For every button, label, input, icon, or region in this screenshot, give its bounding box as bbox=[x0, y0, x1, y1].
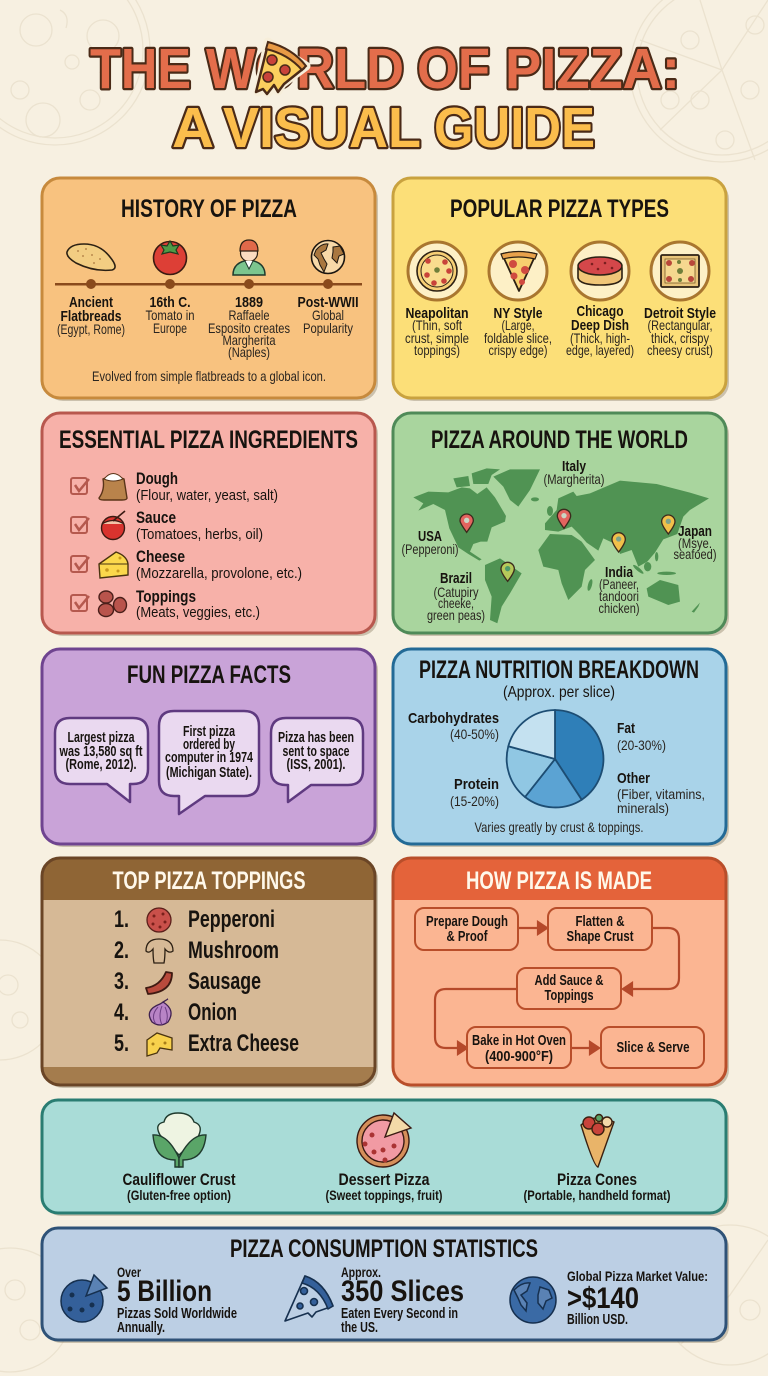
text: 5 billion: Pizzas Sold Worldwide bbox=[117, 1305, 237, 1322]
label: other: minerals) bbox=[617, 800, 669, 816]
step: prepare dough: Prepare Dough bbox=[426, 913, 508, 930]
label: carbohydrates bbox=[408, 710, 499, 742]
item: sausage: Sausage bbox=[188, 968, 261, 995]
icon: ny slice bbox=[489, 242, 547, 300]
icon: pizza slice in title bbox=[256, 42, 306, 94]
step: prepare dough bbox=[415, 908, 518, 950]
subheading: per slice: (Approx. per slice) bbox=[503, 684, 615, 701]
speech bubble: largest pizza bbox=[55, 718, 148, 802]
text: dessert pizza: (Sweet toppings, fruit) bbox=[326, 1187, 442, 1203]
panel: top pizza toppings bbox=[42, 858, 378, 1088]
text: ancient flatbreads: Flatbreads bbox=[60, 308, 122, 325]
label: fat: (20-30%) bbox=[617, 737, 666, 753]
icon: pizza slice bbox=[285, 1276, 333, 1321]
text: sauce bbox=[136, 508, 263, 543]
step: add sauce: Toppings bbox=[544, 987, 594, 1004]
heading: world: PIZZA AROUND THE WORLD bbox=[431, 426, 688, 454]
text: 350 slices: the US. bbox=[341, 1319, 378, 1336]
icon: flour sack bbox=[99, 474, 127, 500]
text: pizza cones: Pizza Cones bbox=[557, 1170, 637, 1189]
label: brazil: green peas) bbox=[427, 607, 485, 623]
text: dessert pizza bbox=[326, 1170, 442, 1203]
icon: flatbread bbox=[67, 244, 115, 270]
text: sauce: Sauce bbox=[136, 508, 176, 527]
label: india: tandoori bbox=[599, 588, 639, 604]
icon: sauce bowl bbox=[102, 511, 125, 540]
text: cheese: (Mozzarella, provolone, etc.) bbox=[136, 565, 302, 582]
icon: globe bbox=[312, 240, 344, 274]
icon: whole pizza bbox=[61, 1275, 107, 1322]
text: chicago deep dish: Deep Dish bbox=[571, 317, 629, 334]
text: 1889: Margherita bbox=[222, 332, 276, 348]
panel: consumption statistics bbox=[42, 1228, 729, 1343]
step: bake: (400-900°F) bbox=[485, 1048, 553, 1065]
arrows bbox=[435, 922, 679, 1054]
text: neapolitan: Neapolitan bbox=[406, 305, 468, 322]
text: chicago deep dish: (Thick, high- bbox=[570, 330, 630, 346]
speech bubble: pizza in space bbox=[271, 718, 363, 802]
item: extra cheese: 5. bbox=[114, 1030, 129, 1057]
text: pizza cones bbox=[524, 1170, 670, 1203]
item: extra cheese bbox=[114, 1030, 299, 1057]
text: 5 billion: Annually. bbox=[117, 1319, 165, 1336]
map pins bbox=[460, 509, 675, 581]
label: other: (Fiber, vitamins, bbox=[617, 786, 705, 802]
text: 16th century: 16th C. bbox=[150, 294, 190, 311]
text: ny style: crispy edge) bbox=[488, 342, 548, 358]
title: A bbox=[172, 96, 214, 160]
text: 1889: 1889 bbox=[235, 294, 263, 311]
heading: facts: FUN PIZZA FACTS bbox=[127, 661, 291, 689]
text: ancient flatbreads bbox=[57, 294, 125, 337]
step: slice and serve bbox=[601, 1027, 704, 1068]
text: toppings bbox=[136, 587, 260, 621]
text: market value: Billion USD. bbox=[567, 1311, 628, 1328]
text: 1889: Esposito creates bbox=[208, 320, 290, 336]
text: 350 slices: Approx. bbox=[341, 1264, 381, 1280]
panel: history of pizza bbox=[42, 178, 378, 401]
step: slice and serve: Slice & Serve bbox=[616, 1039, 690, 1056]
label: brazil: cheeke, bbox=[438, 595, 474, 611]
checkboxes bbox=[71, 478, 89, 611]
icon: pizza cone bbox=[581, 1114, 614, 1167]
label: brazil: Brazil bbox=[440, 570, 472, 587]
title: WORLD bbox=[206, 37, 404, 101]
world map bbox=[413, 468, 709, 623]
item: pepperoni bbox=[114, 906, 275, 933]
text: 16th century: Tomato in bbox=[146, 307, 194, 323]
label: japan: Japan bbox=[678, 523, 712, 540]
speech bubble: largest pizza: was 13,580 sq ft bbox=[59, 743, 142, 760]
speech bubble: first computer order: First pizza bbox=[183, 723, 235, 740]
text: toppings: (Meats, veggies, etc.) bbox=[136, 604, 260, 621]
text: cauliflower crust bbox=[122, 1170, 236, 1203]
icon: tomato bbox=[154, 241, 186, 274]
text: chicago deep dish bbox=[566, 303, 634, 358]
step: add sauce bbox=[517, 968, 621, 1009]
text: toppings: Toppings bbox=[136, 587, 196, 606]
label: fat: Fat bbox=[617, 720, 635, 737]
text: dessert pizza: Dessert Pizza bbox=[338, 1170, 430, 1189]
item: pepperoni: Pepperoni bbox=[188, 906, 275, 933]
heading: types: POPULAR PIZZA TYPES bbox=[450, 195, 669, 223]
icon: dessert pizza bbox=[357, 1113, 411, 1167]
text: cheese bbox=[136, 547, 302, 582]
step: bake bbox=[467, 1027, 571, 1068]
text: post-wwii: Global bbox=[312, 307, 344, 323]
text: ny style: (Large, bbox=[502, 317, 534, 333]
heading: toppings: TOP PIZZA TOPPINGS bbox=[112, 867, 306, 895]
title: VISUAL bbox=[223, 96, 421, 160]
title: GUIDE bbox=[434, 96, 595, 160]
icon: chicago deep dish bbox=[571, 242, 629, 300]
text: neapolitan: crust, simple bbox=[405, 330, 469, 346]
text: detroit style: cheesy crust) bbox=[647, 342, 713, 358]
text: detroit style: thick, crispy bbox=[651, 330, 709, 346]
step: flatten: Flatten & bbox=[576, 913, 625, 930]
pin: india bbox=[612, 533, 625, 552]
icon: detroit style bbox=[651, 242, 709, 300]
heading: history: HISTORY OF PIZZA bbox=[121, 195, 297, 223]
heading: ingredients: ESSENTIAL PIZZA INGREDIENTS bbox=[59, 426, 358, 454]
item: pepperoni: 1. bbox=[114, 906, 129, 933]
speech bubble: pizza in space: Pizza has been bbox=[278, 729, 354, 746]
text: detroit style: (Rectangular, bbox=[648, 317, 712, 333]
text: 16th century bbox=[146, 294, 194, 336]
text: 1889: Raffaele bbox=[228, 307, 270, 323]
text: sauce: (Tomatoes, herbs, oil) bbox=[136, 526, 263, 543]
label: usa bbox=[402, 528, 458, 557]
item: sausage bbox=[114, 968, 261, 995]
item: extra cheese: Extra Cheese bbox=[188, 1030, 299, 1057]
panel: alternative pizzas bbox=[42, 1100, 729, 1216]
text: ny style: foldable slice, bbox=[484, 330, 552, 346]
step: bake: Bake in Hot Oven bbox=[472, 1032, 566, 1049]
label: fat bbox=[617, 720, 666, 753]
timeline bbox=[55, 279, 362, 289]
speech bubble: pizza in space: (ISS, 2001). bbox=[286, 756, 346, 773]
label: japan: (Msye. bbox=[678, 535, 712, 551]
speech bubble: largest pizza: (Rome, 2012). bbox=[66, 756, 136, 773]
caption: nutrition: Varies greatly by crust & toppings. bbox=[474, 819, 644, 835]
pin: usa bbox=[460, 514, 473, 532]
label: india bbox=[598, 564, 640, 616]
text: ancient flatbreads: (Egypt, Rome) bbox=[57, 321, 125, 337]
step: add sauce: Add Sauce & bbox=[534, 972, 604, 989]
title: OF bbox=[417, 37, 490, 101]
label: protein bbox=[450, 776, 499, 809]
text: detroit style: Detroit Style bbox=[644, 305, 716, 322]
label: carbohydrates: (40-50%) bbox=[450, 726, 499, 742]
label: brazil bbox=[427, 570, 485, 623]
speech bubble: first computer order bbox=[159, 711, 259, 814]
text: 350 slices: 350 Slices bbox=[341, 1275, 464, 1308]
item: mushroom: 2. bbox=[114, 937, 129, 964]
speech bubble: first computer order: (Michigan State). bbox=[166, 764, 252, 781]
text: 350 slices: Eaten Every Second in bbox=[341, 1305, 458, 1322]
panel: nutrition breakdown bbox=[393, 649, 729, 847]
pie chart bbox=[507, 710, 603, 807]
title bbox=[90, 37, 680, 160]
label: brazil: (Catupiry bbox=[434, 584, 478, 600]
caption: history: Evolved from simple flatbreads to a global icon. bbox=[92, 368, 326, 384]
step: prepare dough: & Proof bbox=[446, 928, 488, 945]
icon: toppings bbox=[98, 591, 126, 616]
text: chicago deep dish: Chicago bbox=[576, 303, 624, 320]
label: italy: (Margherita) bbox=[544, 471, 604, 487]
speech bubble: first computer order: ordered by bbox=[183, 736, 235, 753]
text: dough bbox=[136, 469, 278, 504]
item: onion bbox=[114, 999, 237, 1026]
text: ny style: NY Style bbox=[494, 305, 542, 322]
heading: statistics: PIZZA CONSUMPTION STATISTICS bbox=[230, 1235, 538, 1263]
text: 5 billion bbox=[117, 1264, 237, 1336]
panel: how pizza is made bbox=[393, 858, 729, 1088]
panel: essential ingredients bbox=[42, 413, 378, 636]
text: 16th century: Europe bbox=[153, 320, 187, 336]
pin: brazil bbox=[501, 562, 514, 581]
text: 1889 bbox=[208, 294, 290, 360]
text: post-wwii: Post-WWII bbox=[298, 294, 358, 311]
label: japan bbox=[674, 523, 716, 562]
label: india: (Paneer, bbox=[599, 576, 639, 592]
text: 5 billion: 5 Billion bbox=[117, 1275, 212, 1308]
text: ny style bbox=[484, 305, 552, 358]
text: pizza cones: (Portable, handheld format) bbox=[524, 1187, 670, 1203]
text: neapolitan: toppings) bbox=[414, 342, 460, 358]
text: cauliflower crust: Cauliflower Crust bbox=[122, 1170, 236, 1189]
label: usa: USA bbox=[418, 528, 442, 545]
heading: how made: HOW PIZZA IS MADE bbox=[466, 867, 652, 895]
panel: popular pizza types bbox=[393, 178, 729, 401]
icon: cauliflower bbox=[153, 1113, 206, 1167]
label: other: Other bbox=[617, 770, 650, 787]
step: flatten: Shape Crust bbox=[566, 928, 634, 945]
label: usa: (Pepperoni) bbox=[402, 541, 458, 557]
icon: cheese wedge bbox=[99, 552, 128, 578]
text: post-wwii: Popularity bbox=[303, 320, 353, 336]
item: mushroom bbox=[114, 937, 279, 964]
text: chicago deep dish: edge, layered) bbox=[566, 342, 634, 358]
text: post-wwii bbox=[298, 294, 358, 336]
text: detroit style bbox=[644, 305, 716, 358]
step: flatten bbox=[548, 908, 652, 950]
text: dough: Dough bbox=[136, 469, 178, 488]
text: market value: Global Pizza Market Value: bbox=[567, 1268, 708, 1284]
text: market value bbox=[567, 1268, 708, 1328]
pin: japan bbox=[662, 515, 675, 534]
panel: pizza around the world bbox=[393, 413, 729, 636]
label: other bbox=[617, 770, 705, 816]
label: protein: Protein bbox=[454, 776, 499, 793]
text: neapolitan: (Thin, soft bbox=[412, 317, 462, 333]
title: PIZZA: bbox=[505, 37, 680, 101]
item: onion: 4. bbox=[114, 999, 129, 1026]
label: india: chicken) bbox=[598, 600, 640, 616]
speech bubble: largest pizza: Largest pizza bbox=[68, 729, 135, 746]
text: ancient flatbreads: Ancient bbox=[69, 294, 113, 311]
label: italy: Italy bbox=[562, 458, 587, 475]
icon: neapolitan bbox=[408, 242, 466, 300]
text: 350 slices bbox=[341, 1264, 464, 1336]
icon: chef bbox=[233, 240, 265, 275]
text: 1889: (Naples) bbox=[228, 344, 270, 360]
label: protein: (15-20%) bbox=[450, 793, 499, 809]
text: cheese: Cheese bbox=[136, 547, 185, 566]
text: cauliflower crust: (Gluten-free option) bbox=[127, 1187, 231, 1203]
speech bubble: pizza in space: sent to space bbox=[282, 743, 350, 760]
text: 5 billion: Over bbox=[117, 1264, 141, 1280]
text: neapolitan bbox=[405, 305, 469, 358]
text: dough: (Flour, water, yeast, salt) bbox=[136, 487, 278, 504]
panel: fun pizza facts bbox=[42, 649, 378, 847]
icon: globe bbox=[510, 1277, 556, 1323]
item: mushroom: Mushroom bbox=[188, 937, 279, 964]
label: india: India bbox=[605, 564, 634, 581]
pin: italy bbox=[557, 509, 571, 528]
label: japan: seafoed) bbox=[674, 546, 716, 562]
item: onion: Onion bbox=[188, 999, 237, 1026]
text: market value: >$140 bbox=[567, 1282, 639, 1315]
label: carbohydrates: Carbohydrates bbox=[408, 710, 499, 727]
speech bubble: first computer order: computer in 1974 bbox=[165, 749, 253, 766]
label: italy bbox=[544, 458, 604, 487]
title: THE bbox=[90, 37, 191, 101]
item: sausage: 3. bbox=[114, 968, 129, 995]
